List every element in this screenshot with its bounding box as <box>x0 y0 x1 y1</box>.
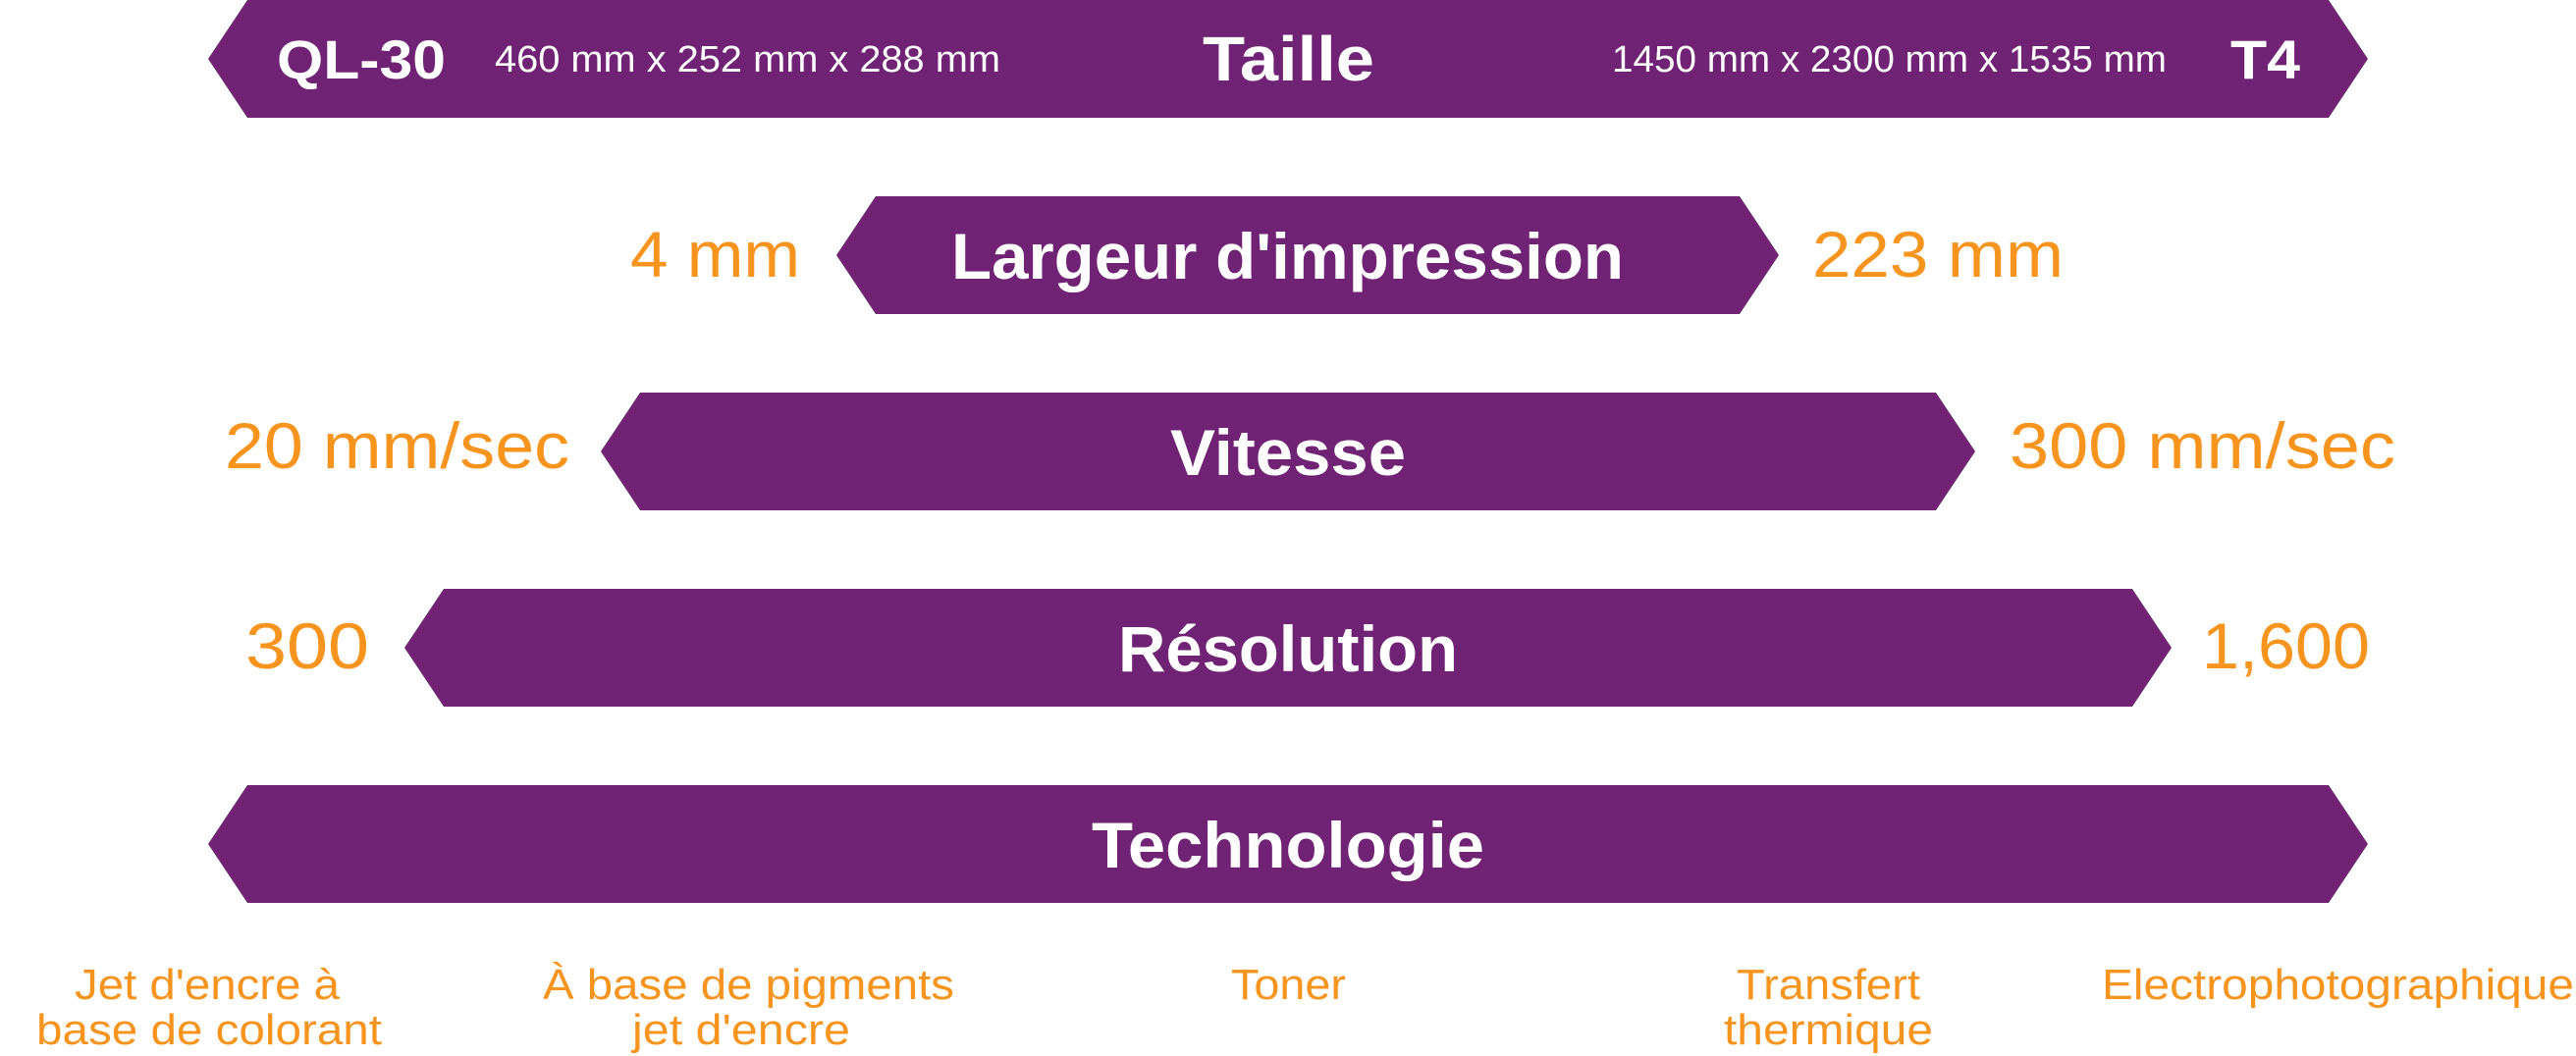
label: Toner: Toner <box>1231 961 1346 1009</box>
row: Technologie <box>208 785 2368 903</box>
label: T4: T4 <box>2230 28 2300 90</box>
value: 4 mm: 4 mm <box>630 218 800 290</box>
label: Jet d'encre à base de colorant: Jet d'encre à <box>75 961 341 1009</box>
row: Résolution <box>245 589 2370 707</box>
value: 300: 300 <box>245 609 369 682</box>
text: T4 dimensions: 1450 mm x 2300 mm x 1535 mm <box>1612 39 2167 80</box>
heading: Technologie: Technologie <box>1092 809 1484 881</box>
bar: Largeur d'impression <box>836 196 1779 314</box>
value: 300 mm/sec: 300 mm/sec <box>2010 409 2395 482</box>
label: Jet d'encre à base de colorant: base de colorant <box>36 1006 382 1054</box>
row: Largeur d'impression <box>630 196 2064 314</box>
label: Jet d'encre à base de colorant <box>36 961 382 1054</box>
heading: Largeur d'impression: Largeur d'impression <box>951 220 1624 292</box>
label: Transfert thermique: thermique <box>1724 1006 1933 1054</box>
label: À base de pigments jet d'encre <box>543 961 954 1054</box>
value: 1,600: 1,600 <box>2202 609 2370 682</box>
bar: Technologie <box>208 785 2368 903</box>
text: QL-30 dimensions: 460 mm x 252 mm x 288 mm <box>495 39 1000 80</box>
label: À base de pigments jet d'encre: À base de pigments <box>543 961 954 1009</box>
label: QL-30: QL-30 <box>277 28 446 90</box>
label: Transfert thermique <box>1724 961 1933 1054</box>
heading: Vitesse: Vitesse <box>1170 416 1406 489</box>
heading: Résolution: Résolution <box>1118 612 1458 685</box>
heading: Taille: Taille <box>1203 24 1374 94</box>
label: Electrophotographique: Electrophotographique <box>2102 961 2574 1009</box>
row: Taille <box>208 0 2368 118</box>
label: À base de pigments jet d'encre: jet d'encre <box>630 1006 850 1054</box>
bar: Taille <box>208 0 2368 118</box>
bar: Vitesse <box>601 393 1975 510</box>
label: Transfert thermique: Transfert <box>1737 961 1920 1009</box>
bar: Résolution <box>404 589 2172 707</box>
value: 223 mm: 223 mm <box>1812 218 2064 290</box>
row: Vitesse <box>225 393 2395 510</box>
value: 20 mm/sec: 20 mm/sec <box>225 409 569 482</box>
